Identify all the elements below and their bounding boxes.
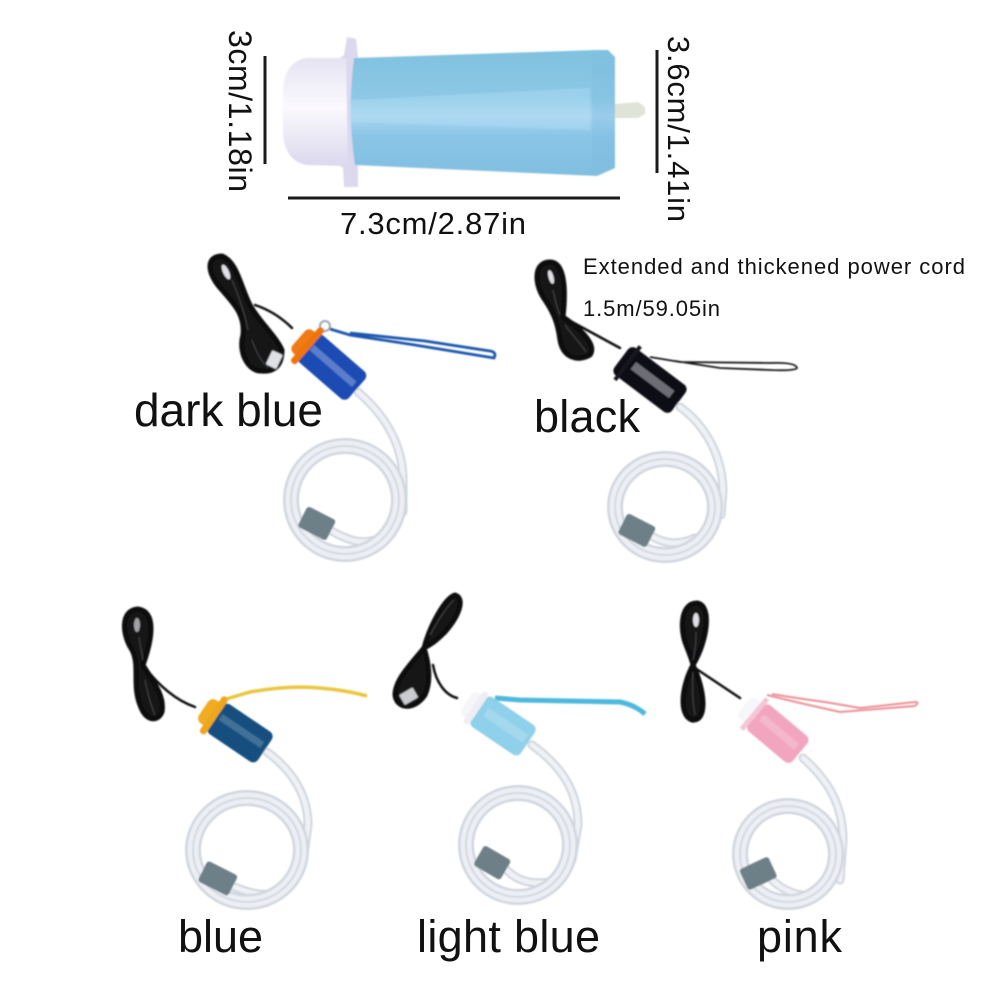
label: dark blue: dark blue — [134, 384, 323, 436]
dimension line: right — [656, 50, 658, 173]
label: blue: blue — [178, 911, 263, 962]
air tube — [650, 407, 723, 543]
icon: wrist strap — [767, 694, 918, 712]
label: black: black — [534, 391, 640, 442]
label: length: 7.3cm/2.87in — [340, 206, 526, 241]
icon: power cord — [682, 603, 740, 720]
icon: power cord — [395, 595, 460, 706]
pump body — [609, 342, 691, 418]
icon: wrist strap — [495, 698, 645, 714]
panel: pump dimensions — [222, 30, 696, 241]
panel: blue pump — [124, 609, 367, 902]
air stone — [197, 860, 238, 896]
tube coil — [291, 446, 399, 554]
label: light blue: light blue — [417, 911, 600, 962]
air tube — [772, 758, 843, 895]
air stone — [297, 506, 336, 541]
air tube — [330, 392, 403, 542]
icon: power cord — [537, 262, 620, 358]
pump body — [284, 321, 372, 406]
air stone — [473, 845, 511, 880]
text: cord length: 1.5m/59.05in — [583, 296, 720, 321]
air tube — [505, 745, 578, 883]
tube coil — [466, 793, 570, 897]
dimension line: left — [264, 56, 266, 164]
tube coil — [740, 806, 836, 902]
panel: dark blue pump — [210, 256, 495, 554]
air tube — [230, 752, 308, 894]
pump body — [191, 690, 277, 768]
panel: light blue pump — [395, 595, 645, 897]
panel: black pump — [537, 262, 797, 555]
label: height left: 3cm/1.18in — [222, 30, 258, 192]
icon: power cord — [210, 256, 292, 371]
icon: power cord — [124, 609, 195, 719]
pump body — [456, 686, 538, 759]
text block: power cord note — [583, 254, 965, 321]
label: pink: pink — [757, 911, 842, 962]
air stone — [739, 856, 778, 891]
tube coil — [615, 459, 715, 555]
pump body — [731, 690, 813, 768]
label: height right: 3.6cm/1.41in — [661, 36, 696, 222]
air stone — [617, 513, 656, 548]
dimension line: bottom — [288, 196, 620, 200]
icon: large pump body — [283, 37, 645, 187]
panel: pink pump — [682, 603, 918, 902]
text: cord description: Extended and thickened power cord — [583, 254, 965, 279]
tube coil — [193, 798, 301, 902]
icon: wrist strap — [223, 687, 367, 700]
icon: wrist strap — [650, 357, 797, 370]
icon: wrist strap — [320, 321, 495, 358]
